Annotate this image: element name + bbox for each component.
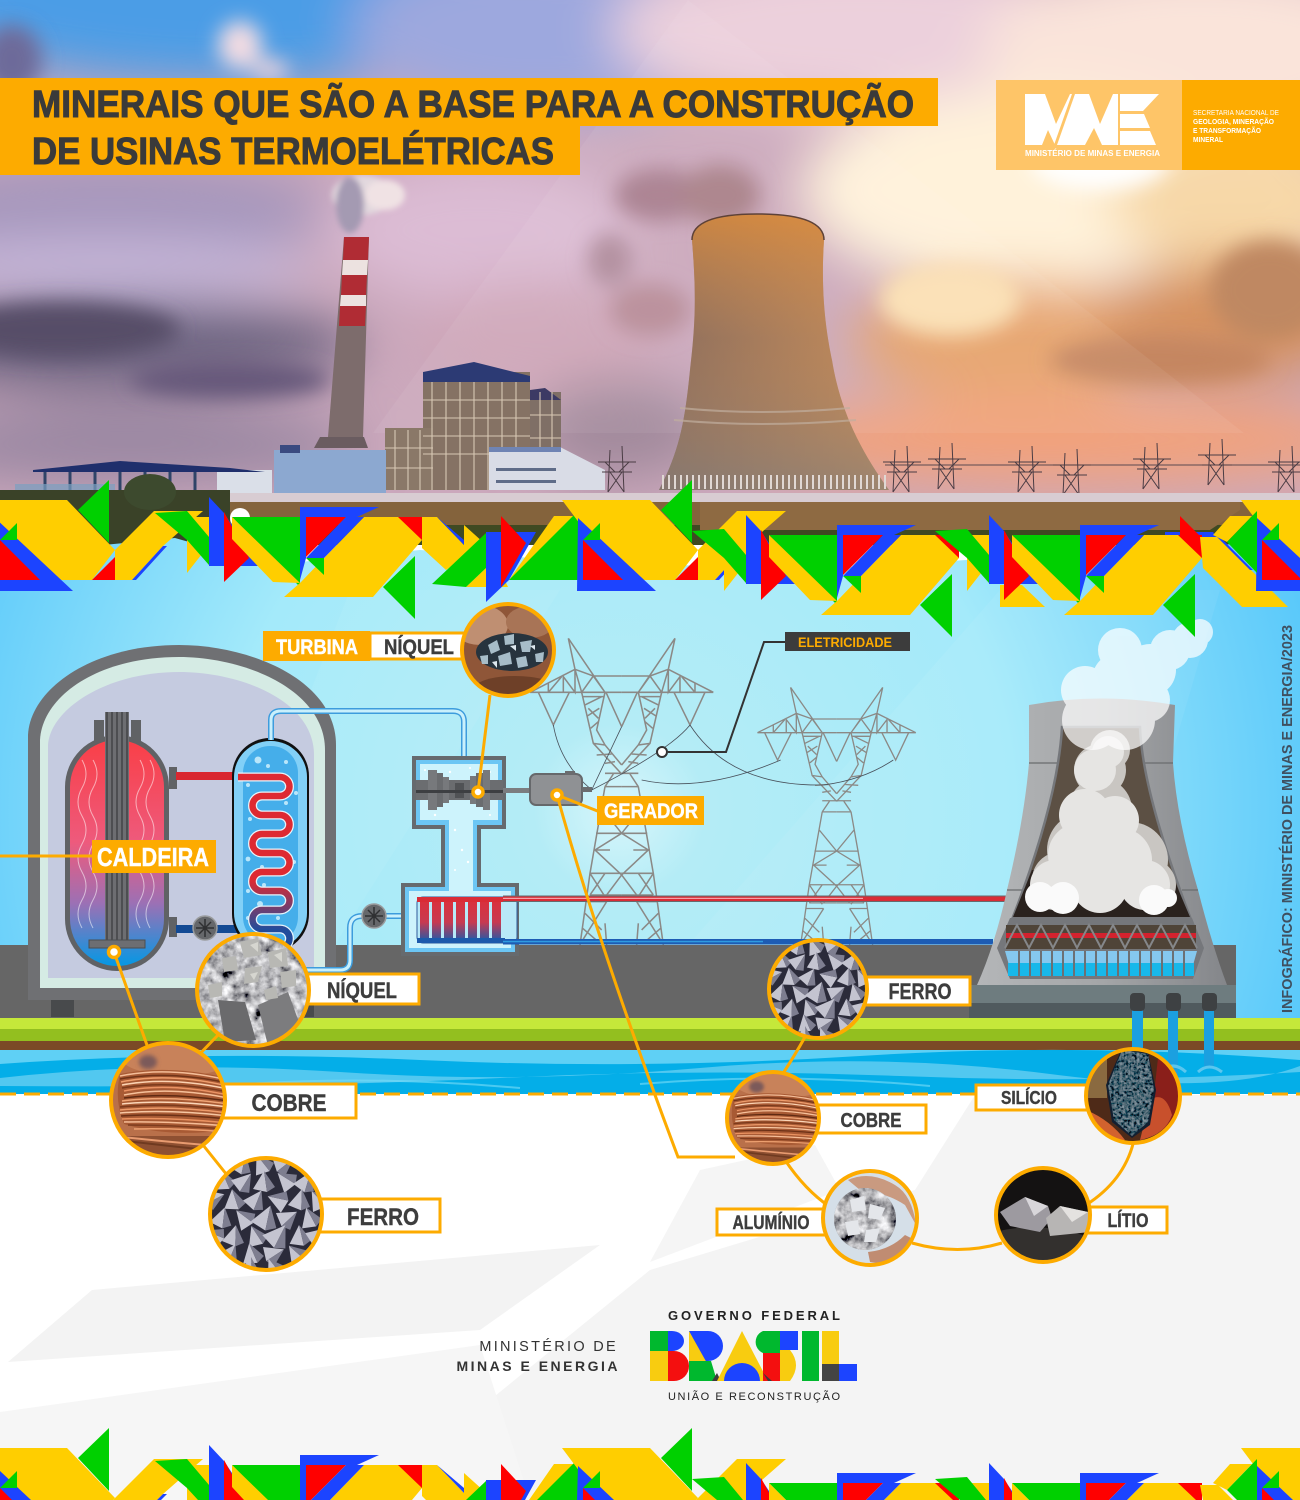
label: eletricidade: ELETRICIDADE <box>798 634 892 650</box>
label: lítio <box>1083 1207 1167 1233</box>
ministério text: MINISTÉRIO DE <box>479 1338 618 1355</box>
label: cobre <box>215 1084 356 1118</box>
mineral circle: silício <box>1083 1048 1185 1150</box>
lower white area with faint shapes <box>0 1095 1300 1500</box>
label: silício: SILÍCIO <box>1001 1087 1057 1108</box>
ministério text: MINAS E ENERGIA <box>456 1358 620 1374</box>
coolant pipes <box>169 767 238 937</box>
label: cobre direita <box>812 1105 926 1133</box>
tower base <box>969 985 1236 1018</box>
label: ferro: FERRO <box>347 1204 419 1231</box>
pylon right <box>757 687 916 945</box>
condenser coil <box>417 897 517 943</box>
mineral circle: lítio <box>995 1167 1092 1265</box>
pylon left <box>530 638 713 945</box>
label: silício <box>976 1085 1091 1110</box>
horizon pylons <box>598 439 1300 495</box>
ministério text <box>456 1338 620 1374</box>
label: gerador: GERADOR <box>604 800 698 823</box>
mineral circle: cobre direita <box>725 1070 821 1166</box>
sky clouds and colour light <box>0 0 1300 485</box>
label: ferro direita: FERRO <box>888 979 952 1004</box>
industrial buildings <box>15 362 605 494</box>
logo: governo federal brasil: UNIÃO E RECONSTRUÇÃO <box>668 1390 840 1403</box>
label: turbina / níquel: NÍQUEL <box>384 636 454 659</box>
ground and water strip <box>0 945 1300 1094</box>
label: alumínio: ALUMÍNIO <box>732 1212 810 1234</box>
cooling water pipes <box>503 896 1006 944</box>
label: caldeira: CALDEIRA <box>97 842 209 872</box>
ground wall and field <box>0 474 1300 545</box>
outlet pipes and water <box>1130 993 1222 1075</box>
label: ferro direita <box>860 977 970 1005</box>
title: MINERAIS QUE SÃO A BASE PARA A CONSTRUÇÃO <box>32 82 914 126</box>
reactor building <box>28 645 336 1017</box>
logo: governo federal brasil <box>650 1308 857 1403</box>
label: cobre direita: COBRE <box>840 1110 902 1132</box>
brasil mark <box>650 1331 857 1381</box>
mineral circle: ferro <box>208 1156 324 1272</box>
steam pipes <box>271 711 464 970</box>
label: eletricidade <box>785 632 910 651</box>
turbine rotor <box>416 770 503 810</box>
tangram band bottom <box>0 1428 1300 1500</box>
mineral circle: ferro direita <box>767 938 869 1040</box>
logo: MME: MINERAL <box>1193 137 1224 144</box>
label: turbina / níquel <box>263 631 465 661</box>
boiler vessel <box>65 712 169 971</box>
connector lines <box>0 642 1134 1250</box>
logo: MME: SECRETARIA NACIONAL DE <box>1193 110 1279 117</box>
diagram sky background <box>0 538 1300 1050</box>
label: níquel: NÍQUEL <box>327 978 397 1003</box>
generator <box>503 771 592 805</box>
mineral circle: alumínio <box>820 1168 920 1268</box>
label: turbina / níquel: TURBINA <box>276 636 358 659</box>
logo: governo federal brasil: GOVERNO FEDERAL <box>668 1308 840 1323</box>
label: cobre: COBRE <box>252 1090 326 1117</box>
label: ferro <box>312 1199 440 1232</box>
tangram band top <box>0 480 1300 637</box>
turbine housing and condenser <box>401 756 519 956</box>
cooling tower, right <box>969 619 1236 1075</box>
smoke from chimney <box>332 175 405 233</box>
mineral circle: cobre <box>109 1041 227 1159</box>
logo: MME <box>996 80 1300 170</box>
pump by condenser <box>362 904 386 928</box>
title <box>0 78 938 175</box>
power lines <box>553 725 893 790</box>
background photo: thermal power plant at sunset <box>0 0 1300 545</box>
label: níquel <box>300 974 419 1004</box>
mineral circle: níquel, turbina <box>452 602 556 700</box>
chimney <box>314 237 369 448</box>
logo: MME: GEOLOGIA, MINERAÇÃO <box>1193 117 1275 126</box>
tower water basin and lattice <box>997 918 1204 979</box>
marker dots <box>108 747 667 958</box>
title: DE USINAS TERMOELÉTRICAS <box>32 129 554 173</box>
logo: MME: E TRANSFORMAÇÃO <box>1193 126 1262 135</box>
pump in reactor <box>193 916 217 940</box>
dashed waterline <box>0 1092 1300 1096</box>
logo: MME: MINISTÉRIO DE MINAS E ENERGIA <box>1025 149 1160 158</box>
label: alumínio <box>717 1209 829 1235</box>
cooling tower <box>659 214 889 490</box>
steam clouds <box>1025 619 1213 915</box>
steam generator <box>232 738 309 952</box>
credit text: INFOGRÁFICO: MINISTÉRIO DE MINAS E ENERGIA/2023 <box>1279 625 1296 1013</box>
mineral circle: níquel <box>196 933 310 1047</box>
label: lítio: LÍTIO <box>1108 1210 1148 1232</box>
